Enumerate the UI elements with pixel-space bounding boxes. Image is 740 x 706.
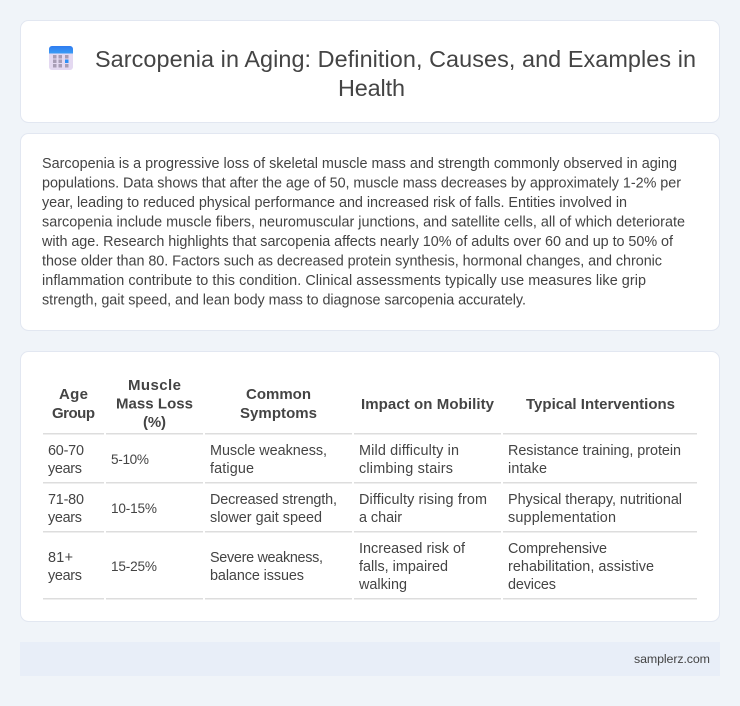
table row: 60-70 years: 60-70 [48,443,84,459]
title: Health [338,75,405,101]
icon: calendar [49,46,73,70]
table row: 81+ years: falls, impaired [359,559,448,575]
table row: 81+ years: Increased risk of [359,541,466,557]
text block: description: year, leading to reduced physical performance and increased risk of falls. Entities involved in [42,195,627,211]
table header: Impact on Mobility [361,396,495,413]
table row: 71-80 years: Physical therapy, nutritional [508,492,682,508]
text block: description: populations. Data shows that after the age of 50, muscle mass decreases by approximately 1-2% per [42,176,681,192]
table row: 60-70 years [48,443,681,477]
text block: description: strength, gait speed, and lean body mass to diagnose sarcopenia accurately. [42,292,526,308]
title [95,46,696,101]
table header [52,377,675,431]
panel: table card [20,352,720,622]
table row: 60-70 years: years [48,461,82,477]
table row: 71-80 years: slower gait speed [210,510,322,526]
table row: 60-70 years: Resistance training, protein [508,443,681,459]
table header: Common [246,386,311,403]
table row: 60-70 years: intake [508,461,547,477]
table header: Age [59,386,88,403]
table row: 60-70 years: Mild difficulty in [359,443,459,459]
table row: 81+ years: rehabilitation, assistive [508,559,654,575]
table row: 81+ years: devices [508,577,556,593]
panel: title card [20,20,720,122]
table row: 81+ years: Comprehensive [508,541,607,557]
table row: 71-80 years: 71-80 [48,492,84,508]
table row: 71-80 years: a chair [359,510,402,526]
title: Sarcopenia in Aging: Definition, Causes, and Examples in [95,46,696,72]
table header: Group [52,405,95,422]
table row: 81+ years: 81+ [48,550,73,566]
table row: 81+ years: years [48,568,82,584]
table row: 81+ years [48,541,654,593]
table row: 71-80 years: 10-15% [111,501,157,516]
table row: 71-80 years: years [48,510,82,526]
footer [20,642,720,676]
table row: 81+ years: walking [358,577,407,593]
table header: Typical Interventions [526,396,675,413]
table header: Symptoms [240,405,317,422]
table row: 60-70 years: climbing stairs [359,461,453,477]
text block: description: sarcopenia include muscle fibers, neuromuscular junctions, and satellite cells, all of which deteriorate [42,214,685,230]
panel: description card [20,134,720,330]
table header: (%) [143,414,166,431]
table row: 60-70 years: fatigue [210,461,254,477]
text block: description: Sarcopenia is a progressive loss of skeletal muscle mass and strength commonly observed in aging [42,156,677,172]
text block: description: those older than 80. Factors such as decreased protein synthesis, hormonal changes, and chronic [42,254,662,270]
table row: 81+ years: 15-25% [111,559,157,574]
table row: 71-80 years: Difficulty rising from [359,492,487,508]
table row: 81+ years: Severe weakness, [210,550,323,566]
table rules [43,433,697,600]
table header: Muscle [128,377,181,394]
table row: 60-70 years: 5-10% [111,452,149,467]
table row: 60-70 years: Muscle weakness, [210,443,327,459]
table row: 71-80 years: supplementation [508,510,616,526]
table row: 81+ years: balance issues [210,568,304,584]
table row: 71-80 years: Decreased strength, [210,492,337,508]
text block: description: inflammation contribute to this condition. Clinical assessments typically use measures like grip [42,273,646,289]
footer: samplerz.com [634,652,710,666]
text block: description [41,156,685,308]
table row: 71-80 years [48,492,682,526]
table header: Mass Loss [116,396,193,412]
text block: description: with age. Research highlights that sarcopenia affects nearly 10% of adults over 60 and up to 50% of [41,234,674,250]
